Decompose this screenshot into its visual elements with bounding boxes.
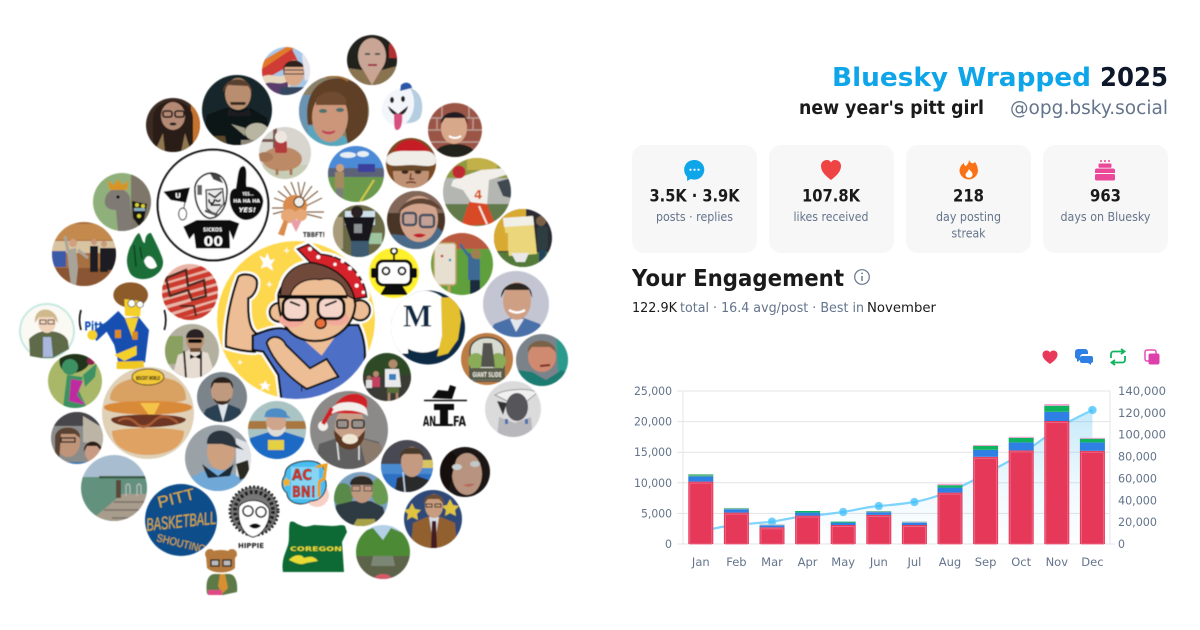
avatar: pitt basketball shouting: BASKETBALL [145, 508, 217, 535]
avatar: simpsons pitt character: Pitt [84, 319, 103, 333]
month labels: May [831, 555, 855, 569]
month labels: Apr [798, 555, 818, 569]
avatar: wedding party [52, 222, 116, 286]
right axis labels: 100,000 [1118, 428, 1166, 442]
avatar: sickos: SICKOS [203, 227, 222, 233]
avatar: antfa logo: AN [423, 415, 436, 430]
avatar: red-haired woman selfie [299, 76, 369, 146]
left axis labels: 15,000 [634, 445, 672, 459]
avatar: capybara with rider [257, 127, 311, 179]
avatar: man yellow logo shirt [333, 472, 391, 526]
cumulative area [701, 410, 1092, 544]
avatar: kayak river [356, 525, 410, 582]
month labels: Jul [906, 555, 921, 569]
avatar: santa hat boy [386, 138, 436, 192]
avatar: football player number 4 [443, 158, 511, 226]
avatar: man with baby yoda [202, 75, 273, 146]
avatar: acbn comic [282, 461, 329, 507]
avatar: sickos: U [175, 191, 181, 200]
avatar: suit man grey [197, 372, 247, 422]
left axis labels: 25,000 [634, 384, 672, 398]
icon: reposts [1111, 349, 1125, 365]
avatar cluster [20, 35, 568, 595]
avatar: man in brown jacket [404, 490, 462, 548]
left axis labels: 10,000 [634, 476, 672, 490]
month labels: Feb [726, 555, 747, 569]
icon: like [1042, 350, 1058, 364]
engagement summary: November [867, 300, 936, 316]
avatar: man with cap [185, 425, 251, 491]
heading: your engagement: Your Engagement [631, 266, 844, 292]
icon: info [855, 270, 869, 284]
stat card: days on bluesky: 963 [1090, 186, 1121, 206]
month labels [691, 555, 1104, 569]
engagement summary: total · 16.4 avg/post · Best in [680, 300, 864, 316]
stat card: day posting streak: day posting [936, 210, 1001, 224]
avatar: football player number 4: 4 [474, 188, 482, 202]
avatar: two women selfie [51, 412, 103, 464]
avatar: michigan [391, 290, 465, 364]
stat card: day posting streak: 218 [953, 186, 984, 206]
avatar: suspenders man [165, 324, 219, 378]
cumulative line [701, 410, 1092, 532]
stat card: day posting streak [906, 145, 1031, 253]
avatar: poptart mascot and woman [431, 233, 493, 295]
display name: new year's pitt girl [799, 98, 984, 119]
avatar: runner [363, 353, 411, 401]
stacked bars [688, 404, 1105, 544]
right axis labels: 80,000 [1118, 450, 1157, 464]
avatar: sickos: 00 [204, 235, 223, 250]
avatar: man with brick wall [428, 103, 482, 157]
avatar: simpsons pitt character [79, 282, 166, 369]
avatar: goth woman with glasses [146, 98, 201, 152]
month labels: Mar [761, 555, 783, 569]
right axis labels: 0 [1118, 537, 1125, 551]
avatar: green foot shape [127, 233, 163, 279]
avatar: biscuit sandwich: BISCUIT WORLD [136, 376, 160, 382]
left axis labels: 0 [665, 537, 672, 551]
avatar: blue hoodie bearded man [248, 401, 306, 459]
avatar: rainbow flag man [262, 47, 310, 95]
avatar: antfa logo: FA [453, 415, 466, 430]
icon: chat bubble [684, 160, 704, 181]
month labels: Nov [1046, 555, 1068, 569]
avatar: sickos: HA HA HA [233, 199, 260, 205]
avatar: pitt basketball shouting: PITT [156, 486, 197, 512]
engagement summary [632, 300, 936, 316]
right axis labels: 40,000 [1118, 493, 1157, 507]
icon: cake [1095, 160, 1115, 180]
avatar: red scribble [162, 264, 218, 320]
avatar: antfa logo [423, 385, 467, 430]
avatar: hippie cartoon: HIPPIE [238, 542, 264, 550]
avatar: stadium field [328, 146, 384, 202]
avatar: crazy cartoon cat: TBBFT! [303, 231, 325, 239]
avatar: sickos: YES... [242, 192, 254, 198]
icon: heart [821, 160, 841, 180]
stat card: posts and replies [632, 145, 757, 253]
right axis labels: 60,000 [1118, 472, 1157, 486]
avatar: smiling man light background [483, 271, 549, 337]
right axis labels [1118, 384, 1166, 551]
avatar: acbn comic: BN! [292, 483, 316, 501]
stat card: day posting streak: streak [952, 226, 986, 240]
avatar: sickos: YES! [239, 207, 256, 214]
title: Bluesky Wrapped [832, 63, 1091, 93]
stat card: likes received: likes received [794, 210, 868, 224]
avatar: man in vest at arena [381, 440, 433, 492]
avatar: pitt basketball shouting: SHOUTING [155, 532, 207, 556]
avatar: acbn comic: AC [292, 466, 312, 484]
left axis labels [634, 384, 672, 551]
right axis labels: 140,000 [1118, 384, 1166, 398]
month labels: Jan [691, 555, 710, 569]
avatar: michigan: M [403, 298, 432, 334]
stat card: posts and replies: 3.5K · 3.9K [650, 186, 740, 206]
avatar: bearded santa man [310, 391, 388, 469]
handle: @opg.bsky.social [1010, 98, 1168, 119]
stat card: likes received: 107.8K [802, 186, 861, 206]
avatar: lake dock [81, 455, 147, 521]
right axis labels: 20,000 [1118, 515, 1157, 529]
avatar: crazy cartoon cat [272, 182, 325, 239]
avatar: hippie cartoon [230, 487, 278, 550]
avatar: football coach teal [516, 334, 568, 386]
month labels: Jun [869, 555, 888, 569]
avatar: buffalo in hat [485, 381, 541, 437]
avatar: woman dark hair leopard print [347, 35, 397, 85]
month labels: Aug [939, 555, 961, 569]
avatar: woman with blue glasses [387, 191, 445, 249]
avatar: man from behind with tv [333, 205, 385, 257]
chart legend icons [1042, 349, 1160, 365]
stat card: days on bluesky [1043, 145, 1168, 253]
avatar: woman dark hair closeup [440, 447, 490, 497]
engagement summary: 122.9K [632, 300, 678, 316]
stat card: likes received [769, 145, 894, 253]
icon: replies [1075, 349, 1093, 365]
avatar: she-hulk [48, 354, 102, 408]
avatar: oregon state [283, 521, 347, 572]
avatar: giant slide patch: GIANT SLIDE [472, 371, 502, 379]
stat card: posts and replies: posts · replies [656, 210, 733, 224]
title: 2025 [1100, 63, 1168, 93]
avatar: sickos [158, 150, 268, 260]
month labels: Oct [1011, 555, 1032, 569]
line points [768, 406, 1096, 526]
avatar: pitt basketball shouting [145, 484, 217, 556]
left axis labels: 5,000 [641, 506, 672, 520]
avatar: mascot with man [494, 209, 552, 268]
avatar: biscuit sandwich [102, 367, 194, 459]
avatar: giant slide patch [461, 333, 513, 385]
avatar: pitt lady illustration [20, 304, 74, 358]
stat card: days on bluesky: days on Bluesky [1060, 210, 1150, 224]
right axis labels: 120,000 [1118, 406, 1166, 420]
icon: quotes [1145, 350, 1160, 364]
avatar: squirrel with crown [93, 173, 151, 231]
avatar: main profile picture [217, 241, 375, 404]
avatar: boo ghost [382, 83, 422, 130]
avatar: oregon state: COREGON [290, 545, 342, 553]
month labels: Dec [1081, 555, 1104, 569]
left axis labels: 20,000 [634, 415, 672, 429]
combo chart: monthly engagement bars and cumulative line [634, 384, 1166, 569]
icon: flame [960, 160, 978, 179]
avatar: bear with tie [205, 549, 237, 595]
month labels: Sep [975, 555, 996, 569]
avatar: robot [369, 248, 419, 298]
